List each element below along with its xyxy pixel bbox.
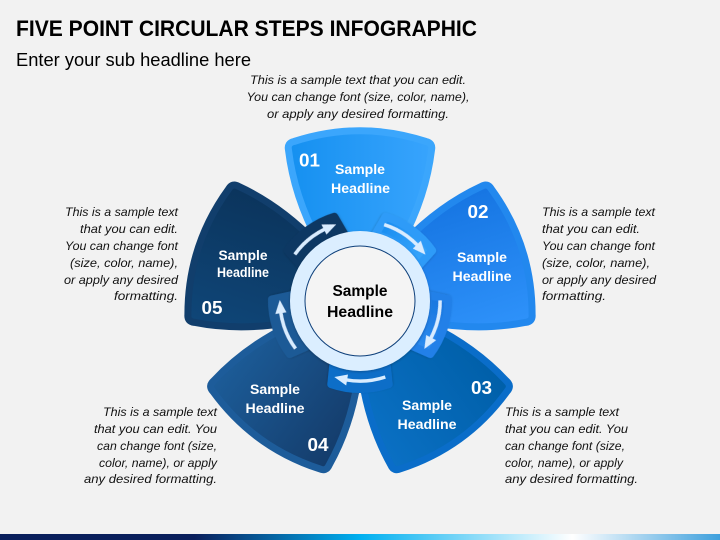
petal 01: Headline	[331, 180, 390, 196]
text block: bottom left: color, name), or apply	[99, 456, 218, 470]
text block: left: This is a sample text	[65, 205, 179, 219]
petal 03: Sample	[402, 397, 452, 413]
petal 01: Sample	[335, 161, 385, 177]
arrow tab: 01 to 02	[374, 213, 435, 267]
text block: bottom right: any desired formatting.	[505, 472, 638, 486]
petal 02: Headline	[452, 268, 512, 284]
text block: bottom left: can change font (size,	[97, 439, 217, 453]
petal 03: Headline	[398, 416, 457, 432]
text block: right: that you can edit.	[542, 222, 640, 236]
petal 04: Sample	[250, 381, 300, 397]
text block: left: You can change font	[65, 239, 179, 253]
text block: bottom left: that you can edit. You	[94, 422, 217, 436]
arrow tab: 05 to 01	[285, 213, 346, 267]
title: FIVE POINT CIRCULAR STEPS INFOGRAPHIC	[16, 16, 477, 41]
text block: left: or apply any desired	[64, 273, 178, 287]
text block: right	[542, 205, 656, 303]
petal 04: 04	[308, 435, 328, 455]
text block: right: or apply any desired	[542, 273, 656, 287]
center circle: Sample	[332, 283, 388, 300]
petal 05: 05	[202, 298, 222, 318]
text block: bottom right: This is a sample text	[505, 405, 620, 419]
petal 04: Headline	[246, 400, 305, 416]
petal 02	[395, 180, 544, 351]
petal 04	[202, 307, 383, 481]
petal 03	[337, 307, 518, 481]
text block: bottom right: can change font (size,	[505, 439, 625, 453]
arrow tab: 04 to 05	[267, 293, 309, 355]
text block: right: (size, color, name),	[542, 256, 650, 270]
text block: left	[64, 205, 179, 303]
text block: left: (size, color, name),	[70, 256, 178, 270]
text block: bottom right: that you can edit. You	[505, 422, 628, 436]
text block: top	[246, 73, 470, 121]
text block: bottom right: color, name), or apply	[505, 456, 624, 470]
center circle: Headline	[327, 304, 393, 321]
arrow tab: 02 to 03	[411, 293, 453, 355]
arrow tab: 03 to 04	[331, 364, 389, 389]
text block: right: You can change font	[542, 239, 656, 253]
petal 03: 03	[471, 378, 492, 398]
text block: bottom right	[505, 405, 638, 486]
text block: right: formatting.	[542, 289, 606, 303]
text block: top: or apply any desired formatting.	[267, 107, 449, 121]
text block: bottom left: any desired formatting.	[84, 472, 217, 486]
text block: bottom left	[84, 405, 218, 486]
text block: bottom left: This is a sample text	[103, 405, 218, 419]
text block: left: formatting.	[114, 289, 178, 303]
petal 05	[176, 180, 325, 351]
text block: left: that you can edit.	[80, 222, 178, 236]
petal 02: Sample	[457, 249, 507, 265]
petal 05: Sample	[218, 247, 268, 263]
petal 01: 01	[299, 150, 320, 170]
text block: top: You can change font (size, color, name),	[246, 90, 470, 104]
petal 01	[288, 131, 432, 241]
subtitle: Enter your sub headline here	[16, 50, 251, 70]
petal 05: Headline	[217, 264, 269, 280]
text block: top: This is a sample text that you can edit.	[250, 73, 466, 87]
bottom gradient bar	[0, 534, 720, 540]
text block: right: This is a sample text	[542, 205, 656, 219]
petal 02: 02	[468, 202, 488, 222]
center circle	[290, 231, 430, 371]
